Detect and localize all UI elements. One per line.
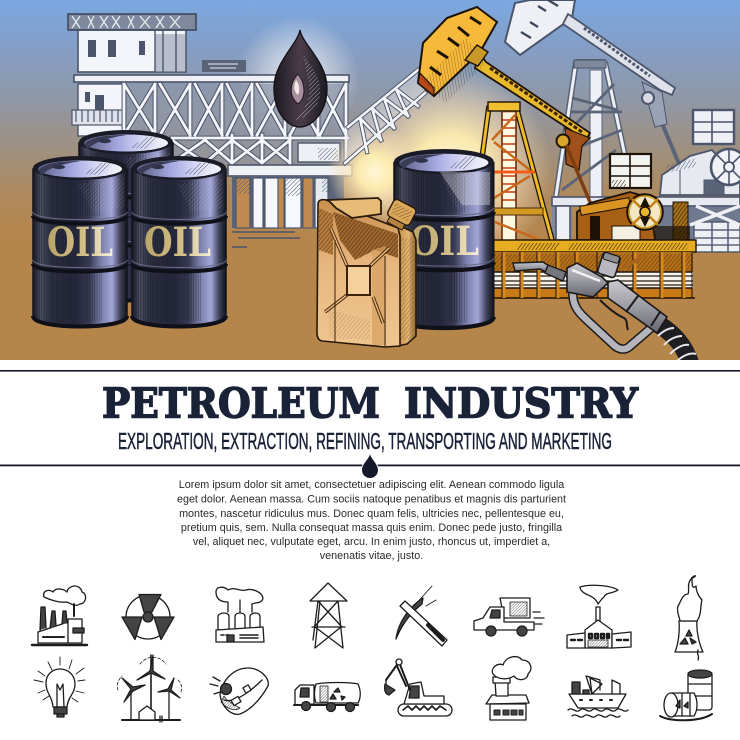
can embossed cross [325,229,389,323]
gold pitman arm [565,128,590,170]
title [102,380,639,428]
gold pump jack [418,7,696,298]
nozzle collar [545,265,566,281]
glow behind drop [242,20,355,121]
body paragraph: venenatis vitae, justo. [320,550,423,562]
icon: pickaxe [396,586,447,646]
title: INDUSTRY [404,380,639,428]
body paragraph: Lorem ipsum dolor sit amet, consectetuer adipiscing elit. Aenean commodo ligula [179,479,564,491]
icon: light bulb [34,657,85,717]
white background derrick [556,60,628,198]
white pump beam [563,14,675,95]
nozzle trigger loop outline [573,292,651,349]
front right oil barrel: OIL [144,219,211,266]
sun glow beside refinery [328,130,404,217]
front right oil barrel [132,156,226,327]
refinery truss structure [124,84,349,166]
nozzle trigger loop [573,292,651,349]
title: PETROLEUM [102,380,380,428]
icon: hard hat [210,668,268,714]
icon: wind turbines [117,655,182,722]
slanted conveyor truss [345,70,425,165]
icon: factory [32,586,87,645]
gold derrick [482,102,552,240]
white background pump jack [505,0,740,252]
jerry can [317,198,417,347]
gold control box [610,154,651,188]
nozzle hose [658,324,691,366]
gold motor housing [577,192,655,240]
far oil barrel: OIL [410,218,479,265]
white motor and wheel [660,149,740,195]
fuel nozzle and hose [513,252,696,366]
nozzle rear tube [608,280,667,333]
icon: tanks with smoke [216,587,264,642]
gold flywheel [628,195,662,229]
nozzle body [567,263,608,297]
nozzle cap [597,252,621,278]
gold pump beam [475,54,590,140]
can handle [328,198,381,218]
gold deck beam [493,240,696,252]
divider drop icon [362,454,378,478]
refinery upper building [68,14,246,72]
white pitman arm [661,125,680,164]
can cap [383,198,417,232]
icon: delivery truck [474,598,544,636]
front left oil barrel [33,156,127,327]
refinery main deck [74,75,349,82]
icon row two [34,650,712,722]
sky to ground background [0,0,740,360]
hero illustration scene [0,0,740,366]
icon: excavator [385,659,452,716]
oil drop [274,30,327,127]
icon: cargo ship [568,676,628,717]
white sketched refinery [68,14,352,247]
gold pump head [418,7,497,96]
body paragraph: pretium quis, sem. Nulla consequat massa quis enim. Donec pede justo, fringilla [181,522,562,534]
icon: toppled radioactive barrels [660,650,712,720]
icon: radiation symbol [122,594,174,640]
front left oil barrel: OIL [47,219,113,266]
sun glow behind derrick [371,74,546,240]
icon: factory with cloud [567,585,631,648]
refinery lower columns [228,165,352,247]
orange support frame [493,252,695,298]
nozzle trigger [600,300,628,330]
top divider rule [0,370,740,372]
far oil barrel [394,149,494,329]
can dark shading [333,212,398,260]
body paragraph: montes, nascetur ridiculus mus. Donec quam felis, ultricies nec, pellentesque eu, [179,508,564,520]
body paragraph: vel, aliquet nec, vulputate eget, arcu. In enim justo, rhoncus ut, imperdiet a, [193,536,550,548]
icon row one [32,576,703,652]
icon: house with chimney smoke [486,657,531,720]
back oil barrel [79,130,173,301]
white control box [693,110,734,144]
icon: tanker truck [294,682,360,712]
nozzle spout [513,262,549,273]
white platform [552,196,740,252]
icon: cooling tower flame [675,576,703,652]
body paragraph [177,479,566,562]
can front panel [317,200,400,347]
refinery left block and balcony [72,84,124,136]
can side panel [397,225,416,346]
icon: pylon [310,583,347,648]
lower divider rule [0,464,740,466]
white pump head [505,0,575,55]
body paragraph: eget dolor. Aenean massa. Cum sociis natoque penatibus et magnis dis parturient [177,494,566,506]
